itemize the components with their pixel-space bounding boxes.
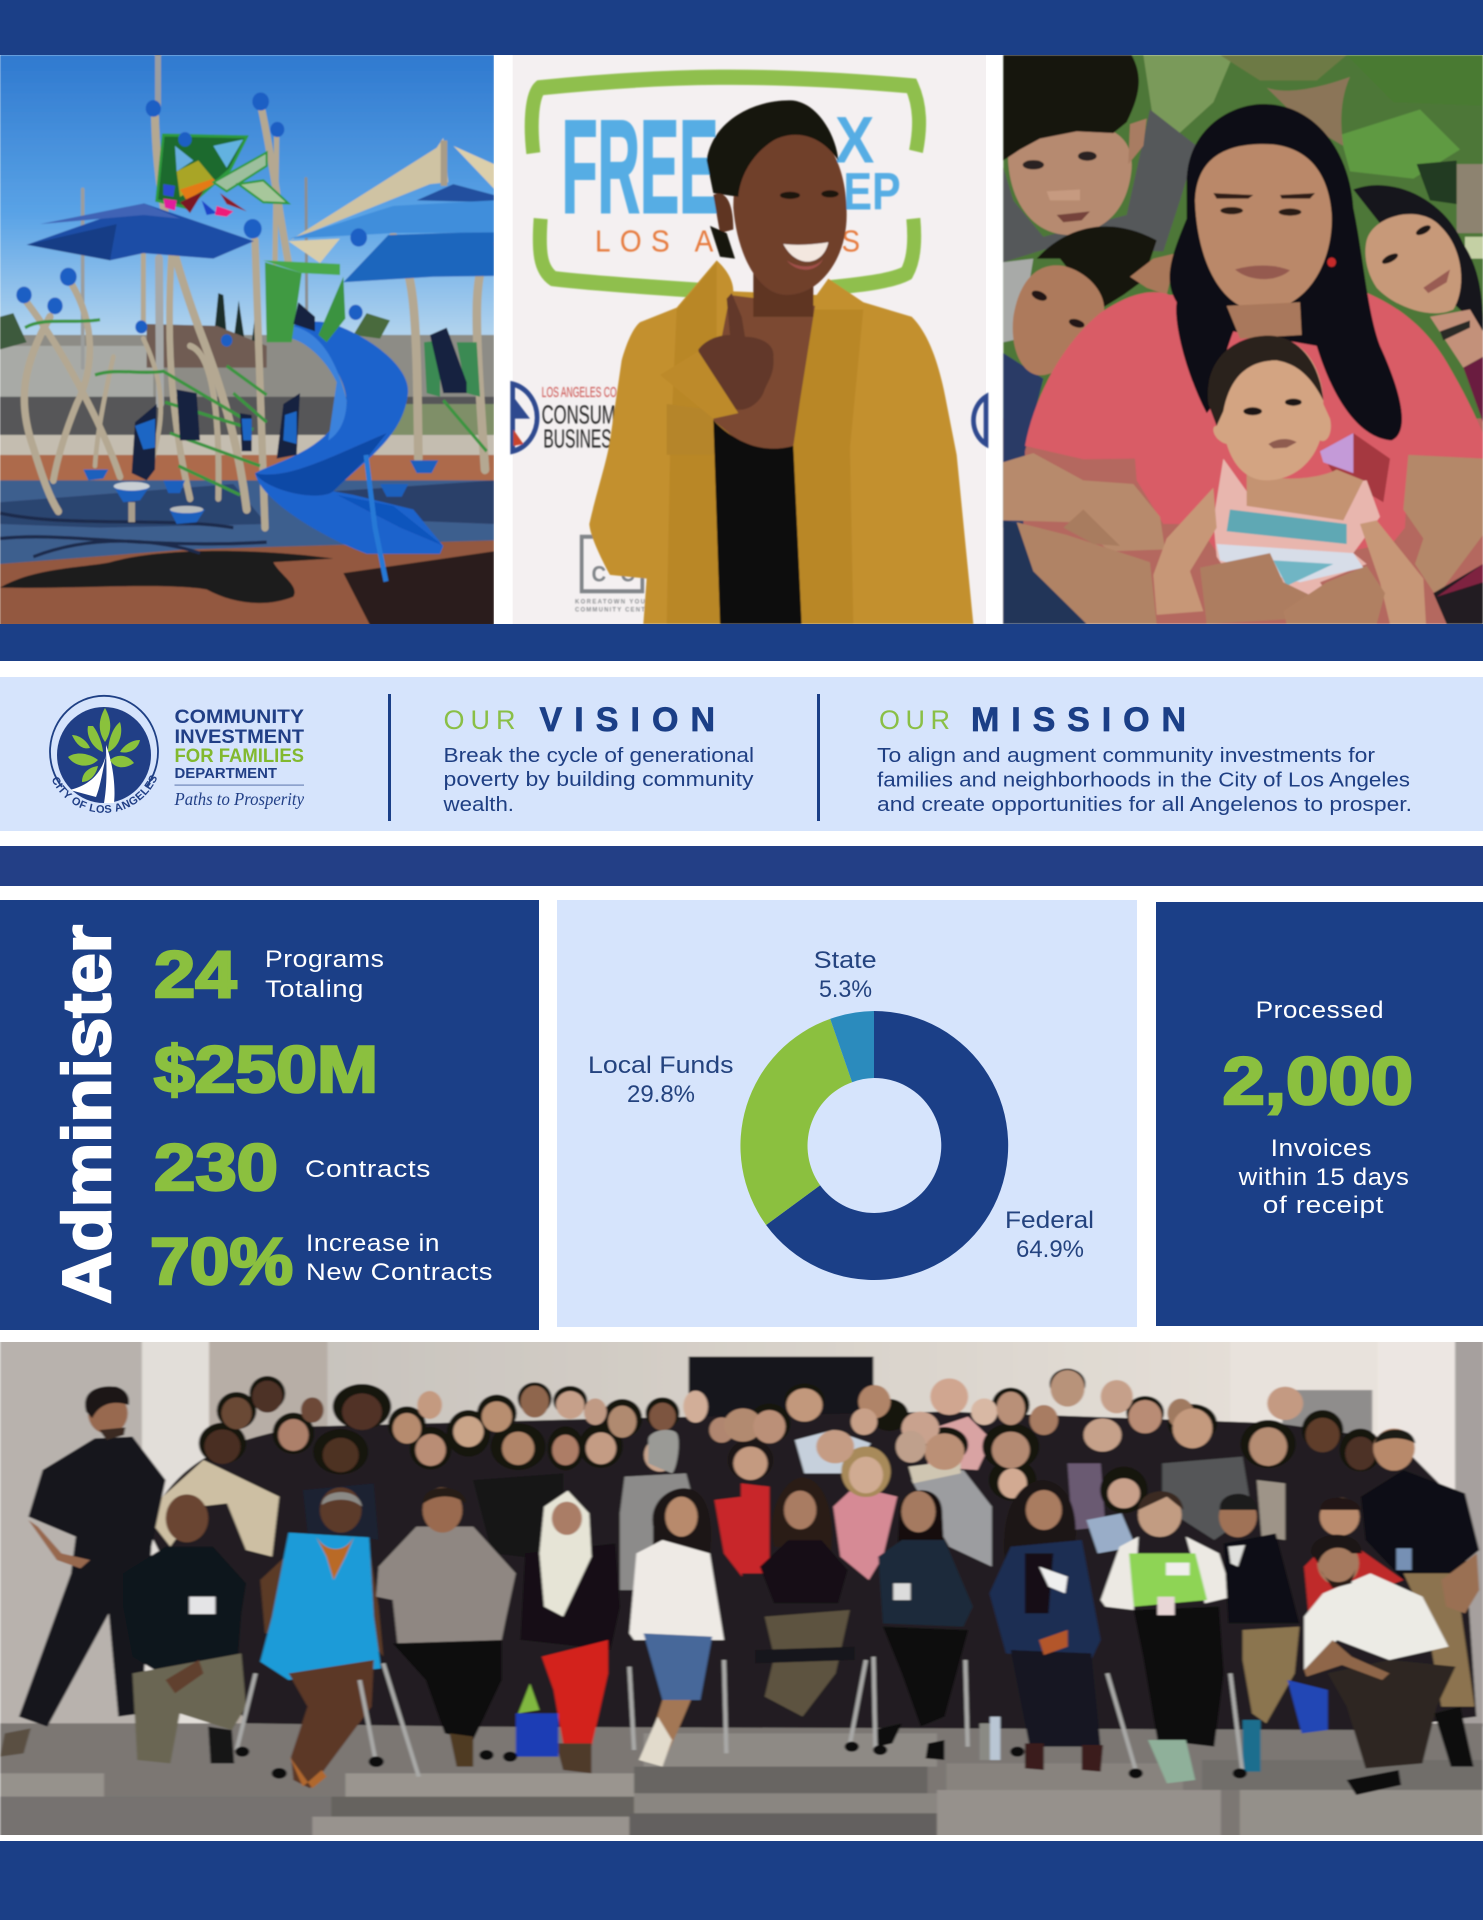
mission text: [877, 701, 1412, 816]
stat: 70% increase: 70%: [150, 1224, 293, 1298]
mission text: MISSION: [971, 701, 1186, 739]
sponsor logos: COMMUNITY CENTE: [575, 606, 650, 613]
top band: [0, 0, 1483, 55]
man black polo: [1219, 1494, 1299, 1723]
slide: [255, 322, 443, 581]
mission text: and create opportunities for all Angelenos to prosper.: [877, 794, 1412, 816]
logo wordmark: Paths to Prosperity: [174, 789, 304, 809]
sponsor logos: BUSINES: [543, 425, 612, 454]
panel: invoices processed: Invoices: [1271, 1135, 1372, 1162]
woman white blazer: [629, 1488, 724, 1767]
mission text: To align and augment community investments for: [877, 745, 1375, 767]
vision text: VISION: [540, 701, 715, 739]
mother hair: [1170, 104, 1402, 440]
label: local funds: 29.8%: [627, 1081, 695, 1108]
logo wordmark: FOR FAMILIES: [174, 746, 304, 767]
mother arm under: [1003, 453, 1165, 551]
baby: [1213, 459, 1380, 604]
skin chest: [713, 295, 815, 453]
label: local funds: [588, 1052, 734, 1108]
label: federal: [1005, 1207, 1094, 1263]
girl right: [1353, 185, 1483, 331]
baby arms and hands: [1153, 488, 1217, 615]
free tax prep words: S: [842, 224, 860, 259]
label: state: State: [814, 947, 877, 974]
left bottom shirt: [1003, 520, 1100, 624]
woman patterned blouse: [874, 1490, 973, 1760]
panel: invoices processed: within 15 days: [1238, 1164, 1410, 1191]
photo: mother with children: [1002, 55, 1483, 624]
back heads and faces: [199, 1369, 1415, 1513]
logo wordmark: DEPARTMENT: [174, 766, 277, 782]
woman black top: [755, 1477, 855, 1717]
heading: Administer: Administer: [49, 925, 125, 1304]
logo wordmark: INVESTMENT: [174, 727, 304, 748]
middle band: [0, 846, 1483, 886]
free tax prep words: EP: [843, 162, 901, 221]
panel: vision and mission band: [0, 677, 1483, 831]
sponsor logos: [513, 383, 986, 613]
label: local funds: Local Funds: [588, 1052, 734, 1079]
vision text: poverty by building community: [444, 769, 754, 791]
panel: funding donut chart: [557, 900, 1137, 1327]
stat: 230 contracts: [154, 1130, 431, 1204]
hair behind faces: [199, 1369, 1381, 1513]
woman navy jacket: [989, 1480, 1103, 1772]
label: federal: Federal: [1005, 1207, 1094, 1234]
right standing man: [1361, 1429, 1479, 1707]
free tax prep words: FREE: [562, 93, 718, 241]
boy top: [1003, 110, 1197, 262]
back row torsos: [144, 1417, 1285, 1590]
stat: 24 programs totaling: 24: [154, 937, 237, 1011]
band below photos: [0, 624, 1483, 661]
sponsor logos: LOS ANGELES CO: [542, 383, 617, 400]
sponsor logos: C C: [592, 563, 635, 587]
donut chart: [740, 1011, 1008, 1280]
logo seal: [49, 694, 159, 813]
boy left: [1003, 353, 1043, 528]
free tax prep words: X: [835, 104, 874, 177]
label: state: 5.3%: [819, 976, 872, 1003]
woman patterned shirt: [376, 1487, 516, 1767]
sponsor logos: KOREATOWN YOUT: [575, 598, 650, 605]
panel: administer stats: [0, 900, 539, 1330]
photo: staff group: [0, 1342, 1483, 1920]
red shirt man: [1304, 1497, 1404, 1617]
green panels: [265, 262, 302, 342]
logo: [49, 694, 304, 813]
woman blue dress: [260, 1487, 383, 1788]
vision text: wealth.: [442, 794, 514, 816]
stained glass: [157, 135, 288, 217]
free tax prep words: LOS A: [595, 224, 714, 259]
hand: [698, 293, 774, 410]
vision text: OUR: [444, 705, 516, 735]
crouching man white shirt: [1288, 1535, 1474, 1795]
panel: invoices processed: of receipt: [1263, 1192, 1384, 1219]
stones: [83, 460, 438, 524]
right arm mother: [1403, 455, 1483, 597]
pole lines: [24, 55, 490, 528]
bottom band: [0, 1841, 1483, 1920]
vision text: Break the cycle of generational: [444, 745, 754, 767]
kneeling man left: [123, 1494, 246, 1763]
logo wordmark: [174, 707, 304, 809]
lower base fill: [1003, 419, 1483, 624]
crowd base: [147, 1412, 1476, 1730]
sponsor logos: CONSUM: [542, 401, 616, 430]
logo seal: CITY OF LOS ANGELES: [52, 775, 157, 813]
floor: [0, 1723, 1483, 1837]
stat: 70% increase: Increase in: [306, 1230, 440, 1257]
stat: 24 programs totaling: Totaling: [265, 976, 364, 1003]
label: federal: 64.9%: [1016, 1236, 1084, 1263]
standing man: [19, 1437, 166, 1727]
face: [733, 128, 847, 295]
stat: 24 programs totaling: [154, 937, 384, 1011]
label: state: [814, 947, 877, 1003]
panel: invoices processed: [1156, 902, 1483, 1326]
cardigan: [589, 260, 973, 624]
mission text: families and neighborhoods in the City of Los Angeles: [877, 770, 1410, 792]
woman green top: [1101, 1491, 1261, 1783]
photo: playground: [0, 55, 494, 624]
vision text: [442, 701, 754, 816]
stat: 24 programs totaling: Programs: [265, 946, 384, 973]
woman hijab red pants: [516, 1491, 620, 1773]
stat: 230 contracts: 230: [154, 1130, 278, 1204]
children dark: [132, 302, 467, 480]
stat: 230 contracts: Contracts: [305, 1156, 431, 1183]
stat: $250M: $250M: [154, 1032, 378, 1106]
stat: 70% increase: [150, 1224, 493, 1298]
mission text: OUR: [879, 705, 950, 735]
photo: woman thumbs up at Free Tax Prep backdrop: [509, 55, 990, 624]
red shirt: [1025, 291, 1483, 575]
panel: invoices processed: Processed: [1256, 997, 1384, 1024]
knobs: [16, 92, 367, 347]
logo wordmark: COMMUNITY: [174, 707, 304, 728]
stat: 2,000: 2,000: [1222, 1044, 1413, 1119]
stat: 70% increase: New Contracts: [306, 1259, 493, 1286]
chairs: [237, 1657, 1242, 1777]
